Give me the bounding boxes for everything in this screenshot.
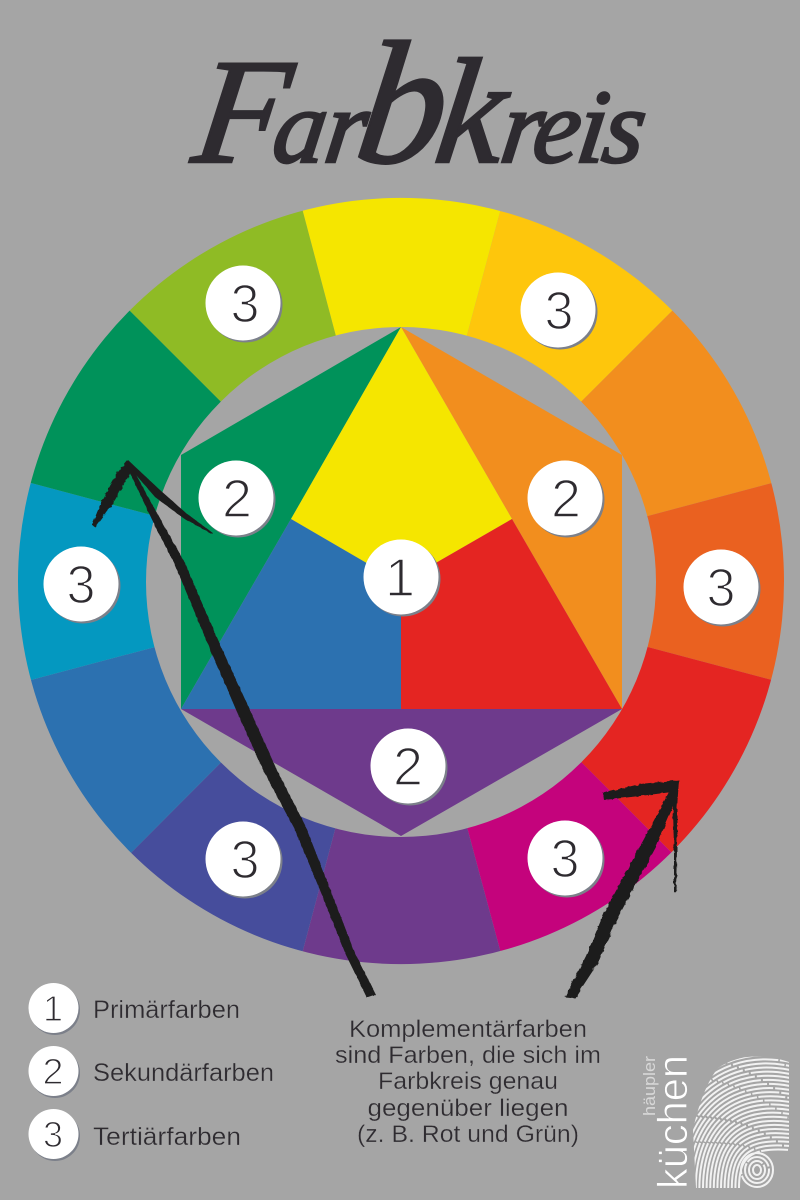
segment: yellow-orange xyxy=(466,211,672,402)
legend badge 2: 2 xyxy=(42,1051,64,1092)
logo: häupler: häupler xyxy=(640,1056,659,1116)
badge: 2 green xyxy=(198,460,276,538)
segment: lime xyxy=(130,210,336,402)
explanation text xyxy=(335,1016,601,1148)
title: a xyxy=(267,68,336,185)
title: i xyxy=(571,68,616,185)
badge: 2 purple xyxy=(370,728,448,806)
badge: 2 orange: 2 xyxy=(551,469,581,529)
badge: 3 teal xyxy=(44,546,120,624)
badge: 3 yellow-orange xyxy=(520,272,598,350)
badge: 3 blue-violet: 3 xyxy=(230,830,260,890)
legend label: Tertiärfarben: Tertiärfarben xyxy=(93,1123,241,1151)
badge: 3 yellow-orange: 3 xyxy=(544,281,574,341)
primary: yellow xyxy=(291,327,512,583)
secondary: purple xyxy=(181,709,622,836)
primary: blue xyxy=(181,519,401,709)
logo: küchen: küchen xyxy=(649,1055,696,1189)
secondary: orange xyxy=(401,327,622,709)
arrow: green to red complement, left xyxy=(92,460,376,998)
inner hexagram xyxy=(181,327,622,836)
badge: 3 red-orange: 3 xyxy=(706,558,736,618)
logo fingerprint icon xyxy=(693,1056,789,1188)
segment: purple xyxy=(302,828,500,964)
explanation text: (z. B. Rot und Grün) xyxy=(357,1121,579,1148)
badge: 3 magenta xyxy=(528,820,604,898)
segment: green xyxy=(30,310,221,514)
title: e xyxy=(527,68,590,185)
legend badge 3: 3 xyxy=(43,1114,63,1155)
badge: 3 lime xyxy=(206,266,282,342)
segment: blue-violet xyxy=(131,762,336,952)
explanation text: gegenüber liegen xyxy=(368,1095,568,1122)
title: k xyxy=(427,29,520,195)
badge: 3 teal: 3 xyxy=(66,555,96,615)
segment: yellow xyxy=(302,198,500,336)
badge: 1 center xyxy=(364,540,440,616)
legend label: Primärfarben: Primärfarben xyxy=(93,996,240,1024)
title: F xyxy=(184,29,302,195)
segment: blue xyxy=(31,647,221,853)
segment: red xyxy=(581,647,771,852)
segment: red-orange xyxy=(647,483,784,680)
badge: 1 center: 1 xyxy=(385,548,415,608)
legend badge 1: 1 xyxy=(43,988,63,1029)
badge: 2 green: 2 xyxy=(222,469,252,529)
primary: red xyxy=(401,519,622,709)
badge: 3 red-orange xyxy=(684,550,760,626)
badge: 3 lime: 3 xyxy=(230,274,260,334)
badge: 2 orange xyxy=(528,460,604,538)
colour wheel outer ring xyxy=(18,198,784,964)
legend badge 1 xyxy=(28,983,80,1035)
legend badge 3 xyxy=(28,1109,80,1161)
secondary: green xyxy=(181,327,401,709)
title: r xyxy=(495,68,553,185)
logo wordmark xyxy=(640,1055,696,1189)
legend xyxy=(28,983,274,1161)
explanation text: Komplementärfarben xyxy=(349,1016,587,1043)
segment: teal xyxy=(18,483,154,680)
title: s xyxy=(597,68,654,185)
legend label: Sekundärfarben: Sekundärfarben xyxy=(93,1059,274,1087)
segment: magenta xyxy=(467,762,672,951)
badge: 3 magenta: 3 xyxy=(550,829,580,889)
legend badge 2 xyxy=(28,1046,80,1098)
arrow: right complement xyxy=(565,780,679,998)
badge: 2 purple: 2 xyxy=(393,737,423,797)
title: b xyxy=(347,7,461,201)
title: r xyxy=(319,68,377,185)
badge: 3 blue-violet xyxy=(206,822,282,898)
explanation text: Farbkreis genau xyxy=(378,1068,558,1095)
segment: orange xyxy=(581,310,772,516)
explanation text: sind Farben, die sich im xyxy=(335,1042,601,1069)
